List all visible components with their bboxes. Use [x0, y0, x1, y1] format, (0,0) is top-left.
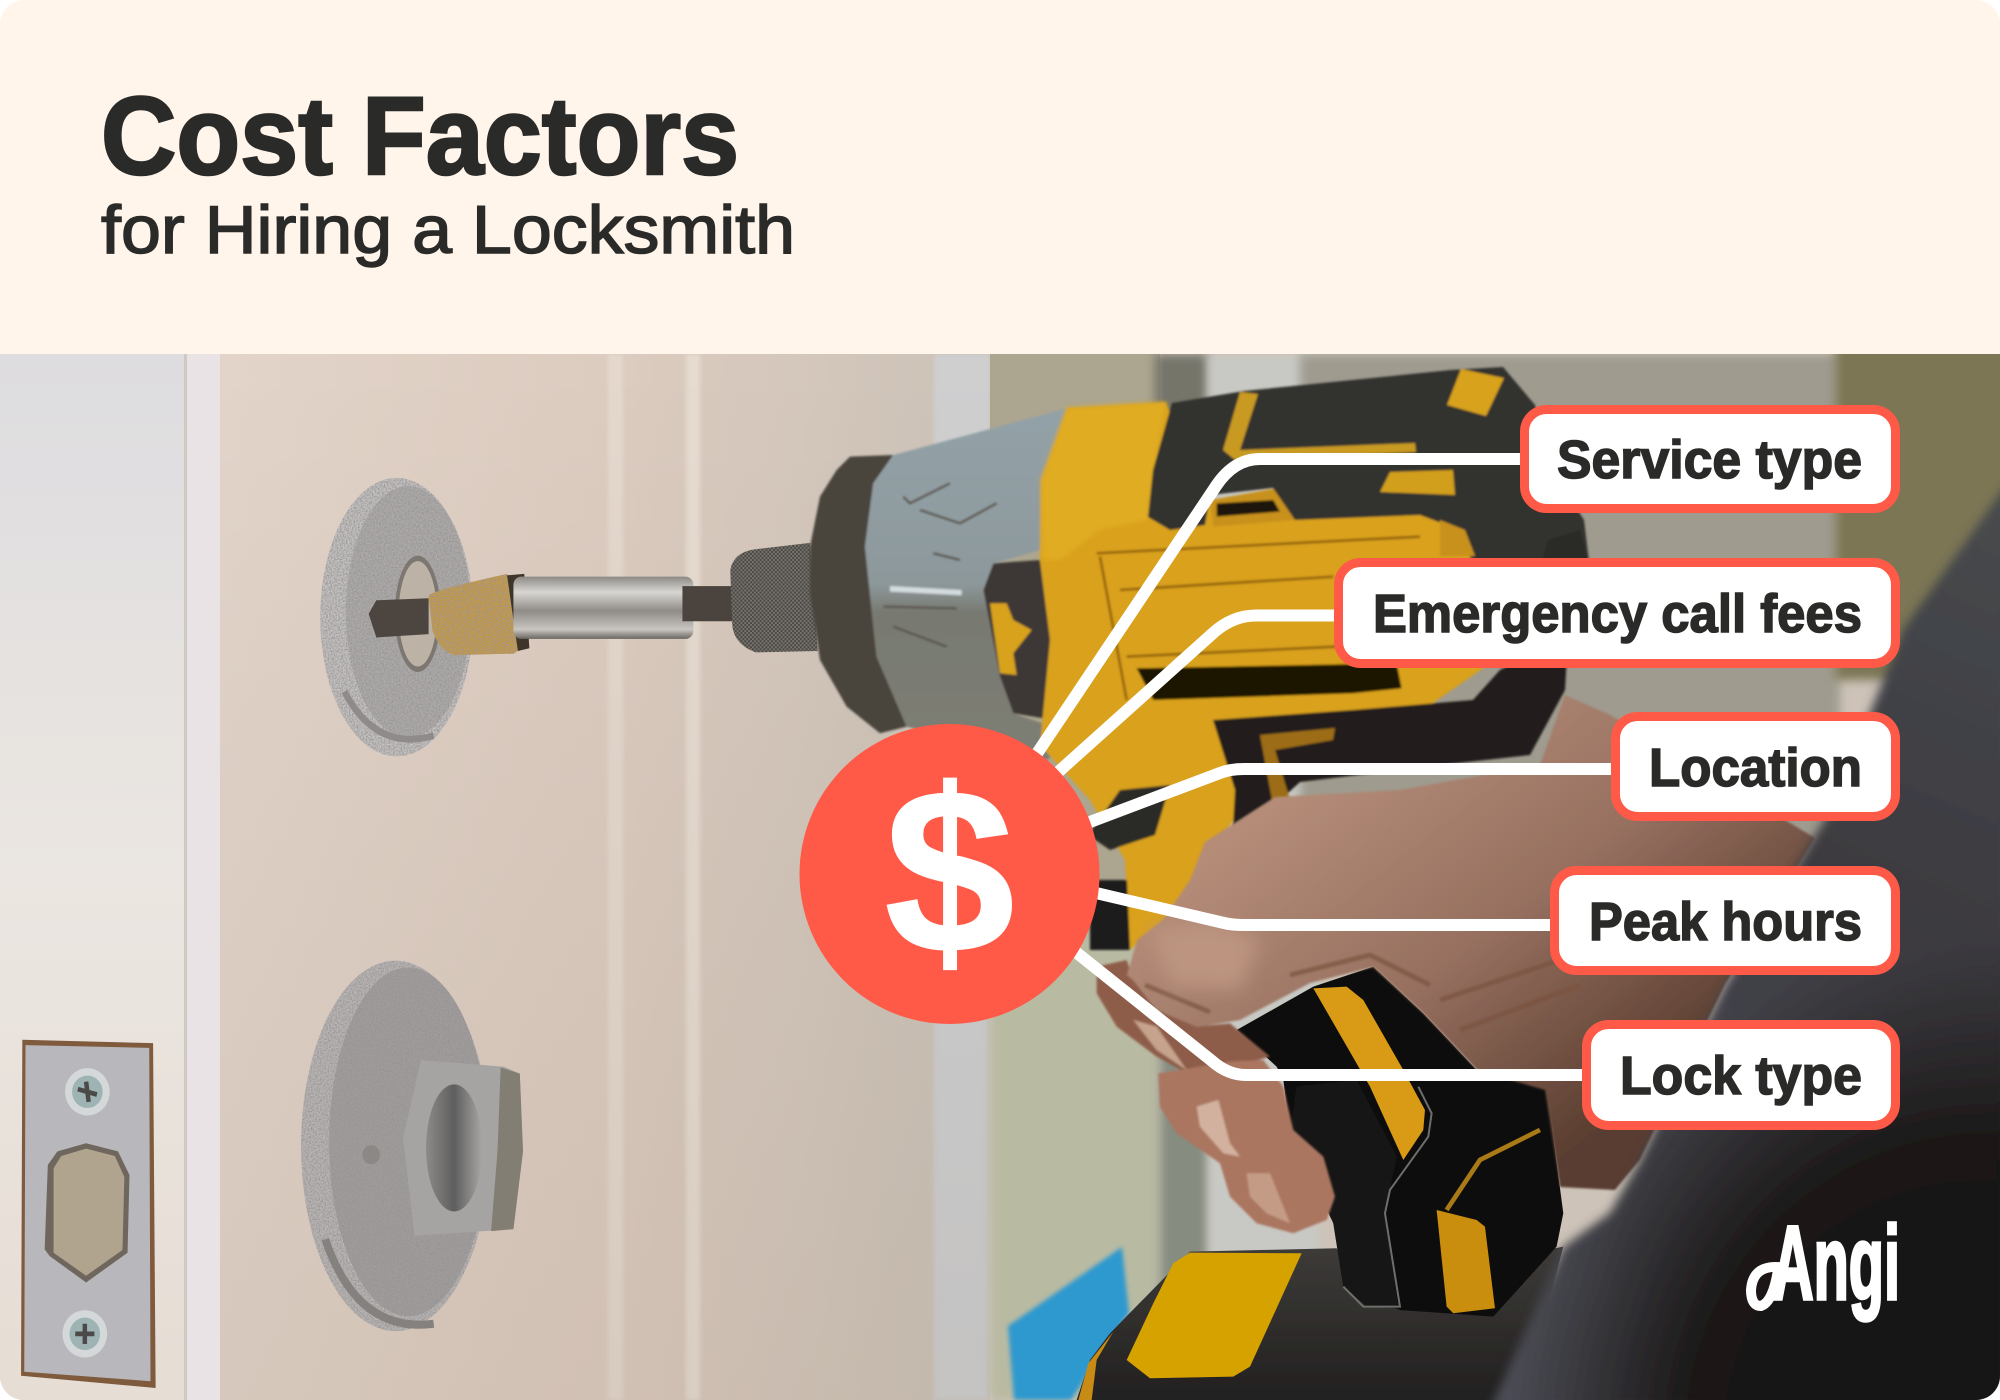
gearcase — [810, 408, 1080, 760]
label: service type: Service type — [1557, 430, 1862, 490]
title — [101, 95, 792, 268]
dollar sign: $ — [884, 740, 1015, 1002]
housing details traced from the photo — [1097, 488, 1420, 700]
label: location — [1616, 716, 1896, 816]
drill bit and chuck — [369, 543, 818, 655]
rubber nose — [810, 455, 907, 733]
black top housing — [1148, 367, 1590, 570]
upper rosette — [320, 478, 473, 756]
door hardware — [21, 478, 523, 1388]
door and blurred background — [0, 340, 2000, 1400]
handle — [1237, 967, 1563, 1317]
label: emergency call fees: Emergency call fees — [1373, 584, 1862, 644]
label: peak hours: Peak hours — [1589, 892, 1862, 952]
label: lock type — [1586, 1024, 1896, 1126]
dark smudge — [982, 558, 1052, 720]
dollar circle — [800, 724, 1100, 1024]
label: peak hours — [1554, 870, 1896, 970]
line: location — [1090, 769, 1620, 822]
header band — [0, 0, 2000, 354]
lower rosette and thumb turn — [301, 961, 523, 1331]
label: service type — [1524, 410, 1896, 508]
line: service type — [1034, 459, 1530, 758]
Angi logo: Angi — [1772, 1205, 1900, 1322]
label: location: Location — [1649, 738, 1862, 798]
connector lines — [1034, 459, 1620, 1075]
line: emergency call fees — [1056, 616, 1344, 774]
dark window — [1137, 663, 1402, 700]
Angi logo — [1751, 1205, 1900, 1322]
sleeve — [1490, 480, 2000, 1400]
strike plate — [21, 1040, 156, 1388]
hand — [1097, 695, 1815, 1233]
yellow housing — [1040, 402, 1495, 950]
slot — [1210, 488, 1295, 527]
title: Cost Factors — [101, 75, 739, 198]
black lower housing — [1212, 668, 1568, 826]
thumb and palm — [1127, 695, 1815, 1190]
label: emergency call fees — [1338, 562, 1896, 664]
battery — [1077, 1247, 1563, 1400]
lower fingers — [1158, 1060, 1335, 1233]
drill body — [810, 367, 1590, 950]
index finger — [1097, 960, 1270, 1075]
label: lock type: Lock type — [1620, 1046, 1862, 1106]
handle and battery — [1077, 967, 1563, 1400]
line: peak hours — [1096, 893, 1560, 925]
line: lock type — [1072, 949, 1590, 1075]
silver casing — [865, 408, 1080, 760]
photo: locksmith drilling a door lock — [0, 340, 2000, 1400]
trigger and button — [1088, 785, 1170, 850]
subtitle: for Hiring a Locksmith — [101, 192, 795, 268]
